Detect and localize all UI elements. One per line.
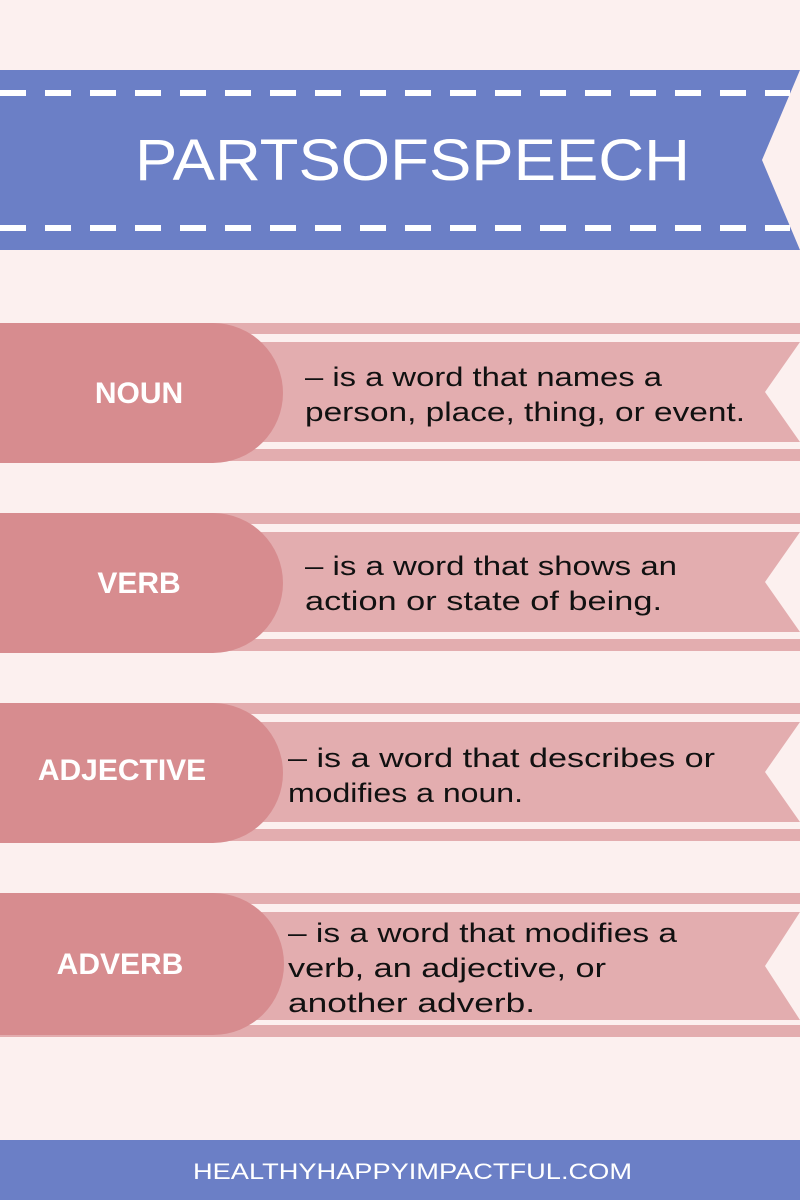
definition: adjective: modifies a noun. [288, 778, 523, 808]
definition: noun: – is a word that names a [305, 362, 663, 392]
definition: verb: – is a word that shows an [305, 551, 677, 581]
definition: adverb: verb, an adjective, or [288, 953, 606, 983]
definition: noun: person, place, thing, or event. [305, 397, 745, 427]
row: noun [0, 323, 800, 463]
definition: adverb: another adverb. [288, 988, 535, 1018]
label: adjective: ADJECTIVE [38, 754, 206, 787]
row: adverb [0, 893, 800, 1037]
row: adjective [0, 703, 800, 843]
definition: verb: action or state of being. [305, 586, 662, 616]
label: verb: VERB [97, 567, 181, 600]
row: verb [0, 513, 800, 653]
label: adverb: ADVERB [57, 948, 183, 981]
title banner [0, 70, 800, 250]
definition: adjective: – is a word that describes or [288, 743, 715, 773]
title: PARTSOFSPEECH [135, 128, 690, 193]
definition: adverb: – is a word that modifies a [288, 918, 678, 948]
label: noun: NOUN [95, 377, 183, 410]
footer [0, 1140, 800, 1200]
footer url: HEALTHYHAPPYIMPACTFUL.COM [193, 1159, 632, 1184]
